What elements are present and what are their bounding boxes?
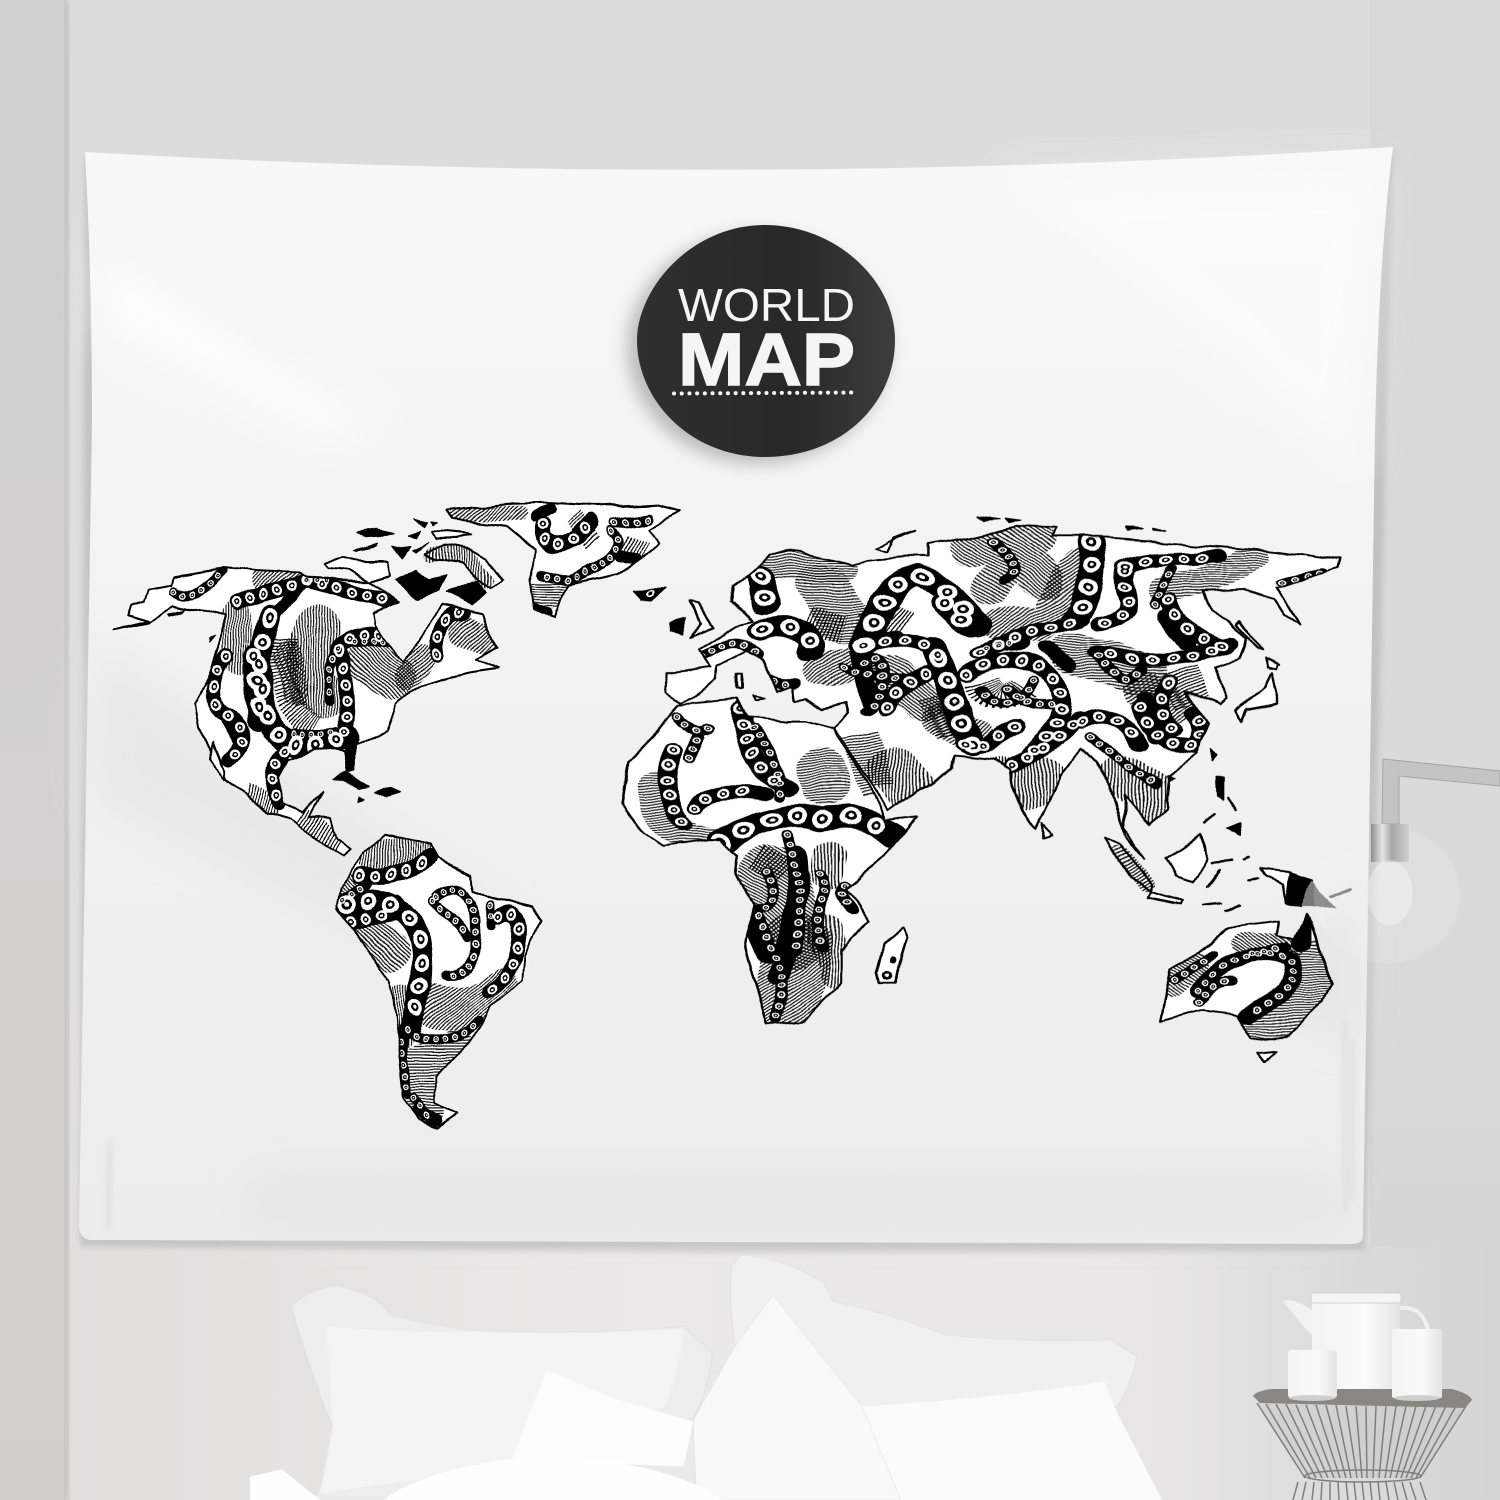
- tea set and side table: [1253, 1293, 1472, 1500]
- right pillow: [730, 1255, 1137, 1413]
- centre sheet: [693, 1295, 901, 1500]
- left pillow: [291, 1286, 712, 1500]
- table wire frame: [1257, 1403, 1467, 1500]
- panel: tapestry cloth: [79, 147, 1393, 1252]
- map: world continents: [111, 503, 1346, 1128]
- pillows and bedding: [250, 1255, 1162, 1500]
- South America: [339, 836, 542, 1128]
- North America: [111, 568, 498, 857]
- title: WORLD: WORLD: [678, 279, 855, 331]
- Greenland: [446, 503, 680, 619]
- front right pillow: [856, 1382, 1162, 1500]
- table top: [1253, 1389, 1472, 1408]
- lamp: [1314, 759, 1500, 963]
- Asian islands: [671, 515, 1346, 1060]
- Eurasia: [666, 526, 1341, 857]
- lamp socket: [1371, 824, 1409, 862]
- Australia: [1160, 915, 1332, 1037]
- Africa: [622, 699, 918, 1024]
- right cup: [1392, 1329, 1442, 1401]
- light bulb: [1367, 860, 1413, 926]
- Madagascar: [877, 924, 909, 984]
- badge: world map sticker: [627, 225, 895, 464]
- lamp arm: [1382, 759, 1500, 824]
- teapot: [1283, 1293, 1428, 1397]
- map: Eurasia, Africa and Australia: [622, 515, 1346, 1060]
- lamp glass globe: [1314, 827, 1460, 963]
- left cup: [1288, 1350, 1337, 1401]
- duvet: [250, 1456, 722, 1500]
- dotted underline: [674, 392, 857, 394]
- front left pillow: [511, 1370, 693, 1467]
- title: MAP: MAP: [678, 318, 855, 401]
- map: Americas and Greenland: [111, 503, 680, 1128]
- Arctic islands and Caribbean: [169, 516, 666, 800]
